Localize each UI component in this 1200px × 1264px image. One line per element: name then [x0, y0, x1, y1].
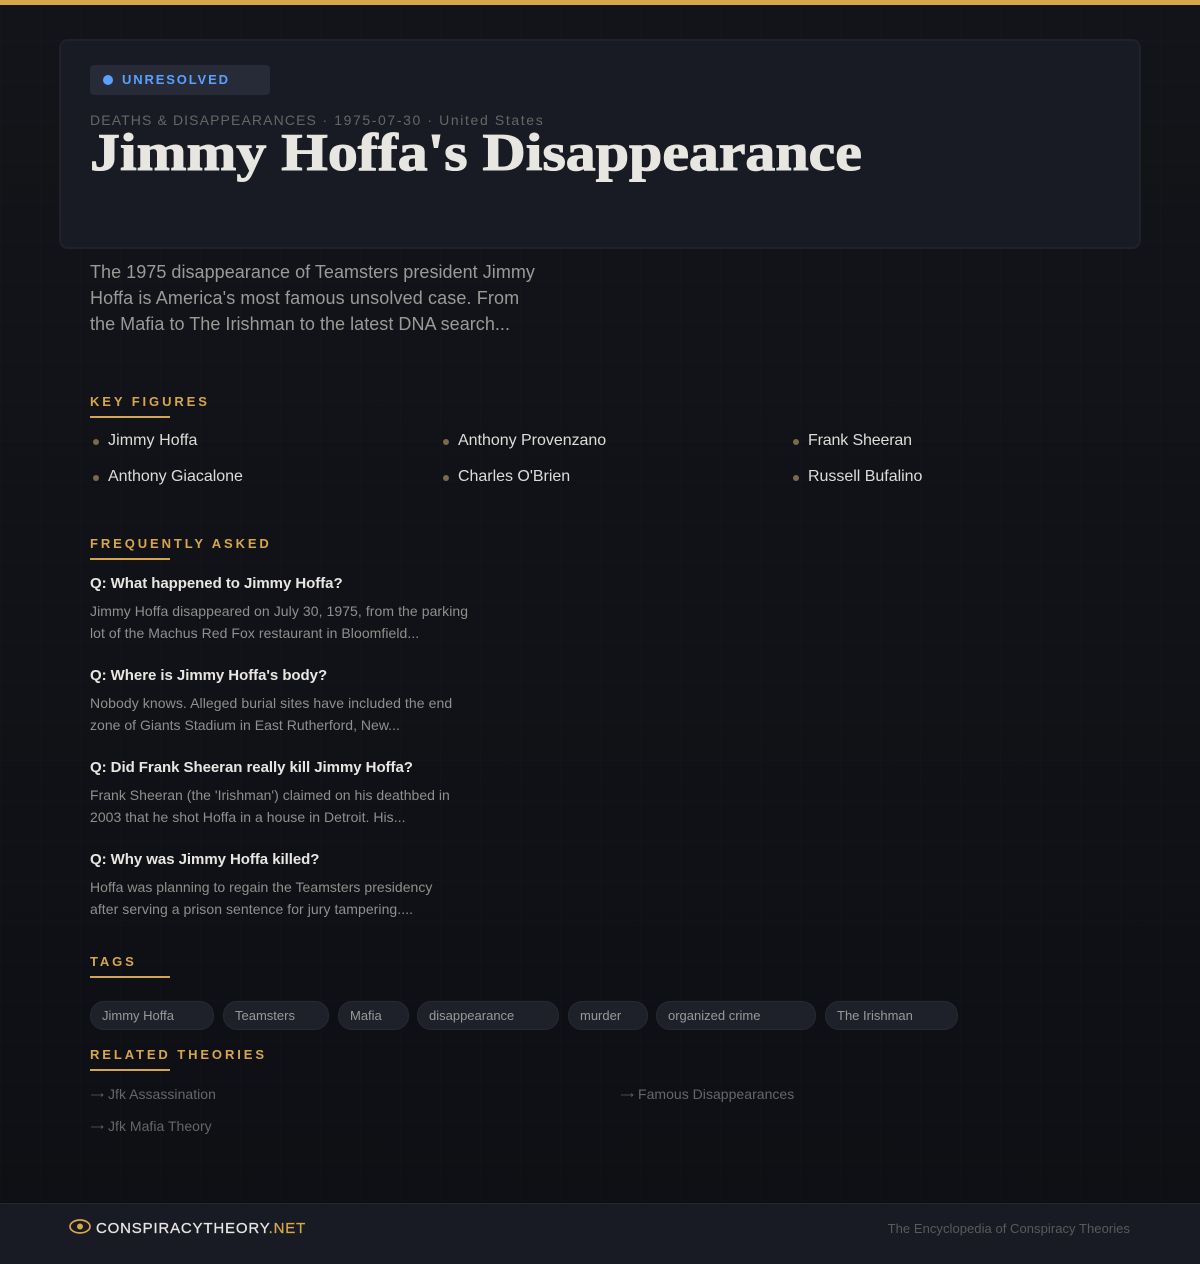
figure: Frank Sheeran: Frank Sheeran — [808, 432, 912, 449]
tag: Mafia: Mafia — [350, 1008, 382, 1023]
category and date line: DEATHS & DISAPPEARANCES · 1975-07-30 · United States — [90, 112, 544, 128]
status badge — [90, 65, 270, 95]
figure: Charles O'Brien: Charles O'Brien — [458, 468, 570, 485]
bullet — [93, 439, 99, 445]
tag: organized crime: organized crime — [668, 1008, 760, 1023]
bullet — [793, 439, 799, 445]
heading underline — [90, 558, 170, 560]
icon: eye logo — [69, 1219, 91, 1234]
answer 3: 2003 that he shot Hoffa in a house in Detroit. His... — [90, 809, 406, 825]
bullet — [793, 475, 799, 481]
tag: murder: murder — [580, 1008, 621, 1023]
heading underline — [90, 976, 170, 978]
tag: Jimmy Hoffa — [90, 1001, 214, 1030]
figure: Jimmy Hoffa: Jimmy Hoffa — [108, 432, 198, 449]
tag: disappearance — [417, 1001, 559, 1030]
bullet — [443, 475, 449, 481]
section: key figures — [90, 394, 922, 485]
intro text: Hoffa is America's most famous unsolved case. From — [90, 288, 519, 308]
heading: related theories: RELATED THEORIES — [90, 1047, 267, 1062]
logo wordmark: CONSPIRACYTHEORY.NET — [96, 1220, 306, 1237]
tag: The Irishman — [825, 1001, 958, 1030]
heading: key figures: KEY FIGURES — [90, 394, 210, 409]
question 1: Q: What happened to Jimmy Hoffa? — [90, 575, 343, 592]
question 2: Q: Where is Jimmy Hoffa's body? — [90, 667, 327, 684]
answer 4 — [90, 879, 432, 917]
answer 4: after serving a prison sentence for jury tampering.... — [90, 901, 413, 917]
title: Jimmy Hoffa's Disappearance — [90, 124, 862, 182]
figure: Anthony Provenzano: Anthony Provenzano — [458, 432, 606, 449]
answer 2: Nobody knows. Alleged burial sites have included the end — [90, 695, 452, 711]
tag: Mafia — [338, 1001, 409, 1030]
footer tagline: The Encyclopedia of Conspiracy Theories — [888, 1221, 1130, 1236]
answer 1: lot of the Machus Red Fox restaurant in Bloomfield... — [90, 625, 419, 641]
heading underline — [90, 1069, 170, 1071]
top accent bar — [0, 0, 1200, 5]
figure: Russell Bufalino: Russell Bufalino — [808, 468, 922, 485]
answer 1 — [90, 603, 468, 641]
related link: Famous Disappearances: Famous Disappearances — [638, 1086, 794, 1102]
figure: Anthony Giacalone: Anthony Giacalone — [108, 468, 243, 485]
tag: disappearance: disappearance — [429, 1008, 514, 1023]
panel: header — [59, 39, 1141, 249]
related link: Jfk Mafia Theory: Jfk Mafia Theory — [108, 1118, 212, 1134]
status dot — [103, 75, 113, 85]
status label: UNRESOLVED — [122, 72, 230, 87]
answer 3: Frank Sheeran (the 'Irishman') claimed on his deathbed in — [90, 787, 450, 803]
bullet — [93, 475, 99, 481]
related link: Jfk Assassination: Jfk Assassination — [108, 1086, 216, 1102]
intro text: the Mafia to The Irishman to the latest DNA search... — [90, 314, 510, 334]
intro text — [90, 262, 535, 334]
heading: frequently asked: FREQUENTLY ASKED — [90, 536, 272, 551]
heading underline — [90, 416, 170, 418]
tag: Jimmy Hoffa: Jimmy Hoffa — [102, 1008, 174, 1023]
answer 4: Hoffa was planning to regain the Teamsters presidency — [90, 879, 432, 895]
tag: Teamsters: Teamsters — [235, 1008, 295, 1023]
tag: Teamsters — [223, 1001, 329, 1030]
tag: murder — [568, 1001, 648, 1030]
intro text: The 1975 disappearance of Teamsters president Jimmy — [90, 262, 535, 282]
answer 3 — [90, 787, 450, 825]
answer 2 — [90, 695, 452, 733]
tag: The Irishman: The Irishman — [837, 1008, 913, 1023]
heading: tags: TAGS — [90, 954, 137, 969]
answer 2: zone of Giants Stadium in East Rutherford, New... — [90, 717, 400, 733]
footer — [0, 1203, 1200, 1264]
tag: organized crime — [656, 1001, 816, 1030]
question 4: Q: Why was Jimmy Hoffa killed? — [90, 851, 319, 868]
question 3: Q: Did Frank Sheeran really kill Jimmy Hoffa? — [90, 759, 413, 776]
answer 1: Jimmy Hoffa disappeared on July 30, 1975, from the parking — [90, 603, 468, 619]
bullet — [443, 439, 449, 445]
